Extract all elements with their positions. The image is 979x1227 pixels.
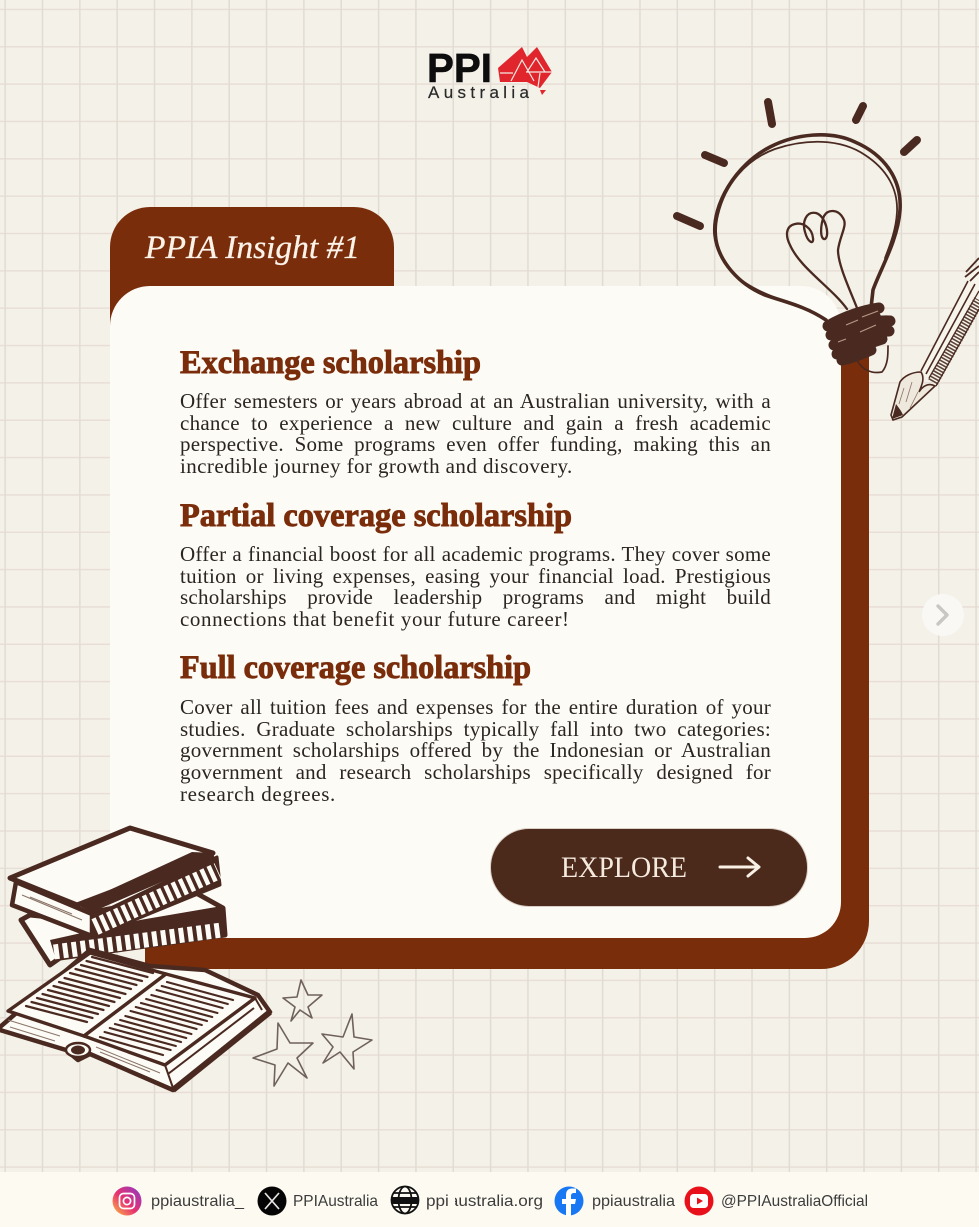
text block: full: research degrees. — [180, 782, 336, 806]
icon: pencil — [890, 257, 979, 421]
label: website: ppiaustralia.org — [426, 1193, 543, 1210]
text block: exchange: chance to experience a new culture and gain a fresh academic — [180, 411, 771, 435]
icon: instagram — [112, 1186, 142, 1216]
icon: facebook — [554, 1186, 584, 1216]
text block: exchange — [180, 389, 771, 478]
explore label and arrow — [561, 851, 761, 884]
logo: PPI Australia — [427, 45, 552, 102]
icon: light bulb — [673, 98, 921, 374]
text block: partial: scholarships provide leadership programs and might build — [180, 585, 771, 609]
footer strip — [0, 1172, 979, 1227]
text block: full — [180, 695, 771, 806]
filament — [787, 211, 857, 309]
icon: X — [258, 1186, 286, 1216]
next arrow button — [922, 594, 964, 636]
explore button — [491, 829, 807, 906]
text block: partial: Offer a financial boost for all academic programs. They cover some — [180, 542, 771, 566]
logo: PPI Australia: Australia — [428, 83, 530, 102]
text block: full: government scholarships offered by the Indonesian or Australian — [180, 738, 771, 762]
text block: partial: tuition or living expenses, easing your financial load. Prestigious — [180, 564, 771, 588]
rays — [677, 102, 917, 226]
icon: globe — [392, 1186, 418, 1214]
text block: exchange: Offer semesters or years abroad at an Australian university, with a — [180, 389, 771, 413]
text block: full: Cover all tuition fees and expenses for the entire duration of your — [180, 695, 771, 719]
panel shadow band — [145, 350, 869, 969]
panel tab — [110, 207, 394, 337]
tab heading: PPIA Insight #1 — [144, 230, 360, 266]
label: X: PPIAustralia — [293, 1193, 378, 1210]
logo: PPI Australia: PPI — [427, 45, 492, 91]
upper book — [10, 828, 220, 936]
text block: exchange: perspective. Some programs even offer funding, making this an — [180, 432, 771, 456]
text block: full: government and research scholarships specifically designed for — [180, 760, 771, 784]
text block: partial — [180, 542, 771, 631]
explore label and arrow: EXPLORE — [561, 851, 687, 884]
heading: Full coverage scholarship: Full coverage scholarship — [180, 650, 531, 686]
text block: exchange: incredible journey for growth and discovery. — [180, 454, 573, 478]
heading: Partial coverage scholarship: Partial coverage scholarship — [180, 498, 572, 534]
label: instagram: ppiaustralia_ — [151, 1193, 245, 1210]
main card panel — [110, 286, 841, 938]
text block: full: studies. Graduate scholarships typically fall into two categories: — [180, 717, 771, 741]
heading: Exchange scholarship: Exchange scholarship — [180, 345, 481, 381]
label: youtube: @PPIAustraliaOfficial — [721, 1193, 868, 1210]
lower book — [21, 893, 225, 965]
label: facebook: ppiaustralia — [592, 1193, 675, 1210]
text block: partial: connections that benefit your future career! — [180, 607, 570, 631]
icon: youtube — [684, 1186, 714, 1216]
